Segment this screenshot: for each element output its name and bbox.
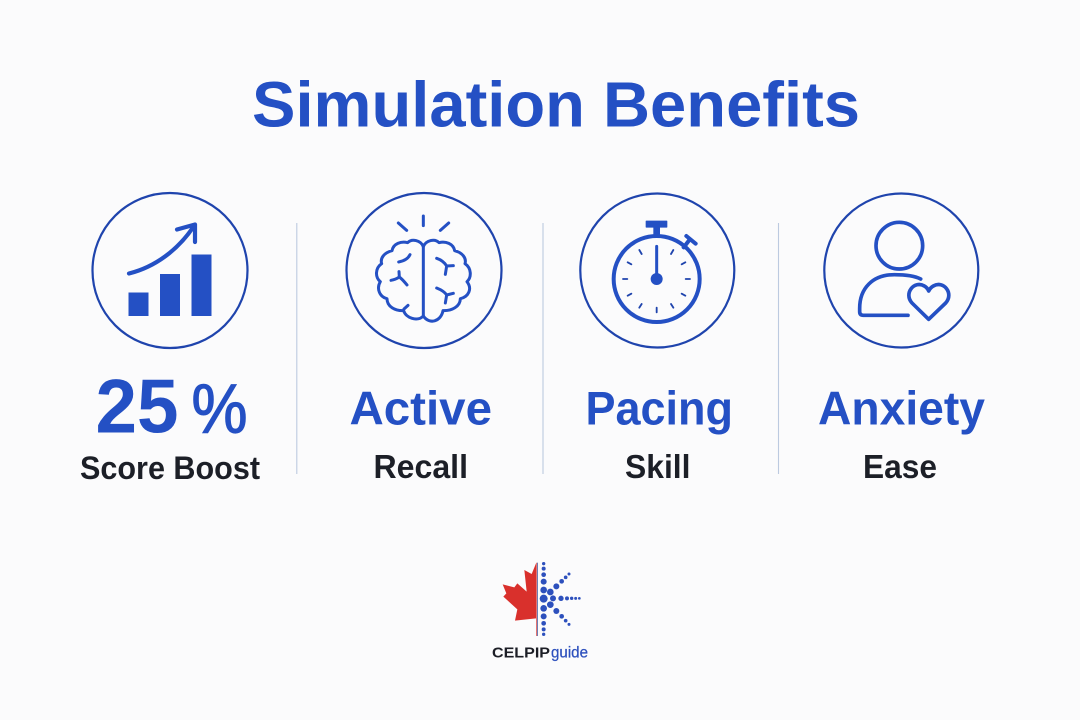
panel: anxiety ease — [818, 194, 985, 485]
panel: pacing skill — [580, 194, 734, 485]
label: ease: Ease — [863, 448, 937, 485]
icon: brain — [346, 193, 502, 348]
icon: stopwatch — [580, 194, 734, 348]
wordmark: CELPIP — [492, 644, 550, 662]
wordmark — [492, 644, 588, 662]
label: pacing: Pacing — [586, 382, 733, 434]
wordmark: guide — [551, 644, 588, 662]
icon: maple leaf and dots — [503, 562, 581, 636]
panel: active recall — [346, 193, 502, 485]
title: Simulation Benefits — [252, 68, 860, 140]
panel: score boost — [80, 193, 260, 486]
stat: 25 percent: % — [192, 370, 248, 448]
icon: rising bar chart — [92, 193, 248, 348]
label: active: Active — [350, 382, 492, 434]
icon: person with heart — [824, 194, 978, 348]
label: score boost: Score Boost — [80, 450, 260, 486]
label: recall: Recall — [374, 448, 468, 485]
stat: 25 percent: 25 — [96, 364, 178, 450]
stat: 25 percent — [96, 364, 248, 450]
logo: CELPIPguide — [492, 562, 588, 662]
label: anxiety: Anxiety — [818, 382, 985, 434]
label: skill: Skill — [625, 448, 690, 485]
